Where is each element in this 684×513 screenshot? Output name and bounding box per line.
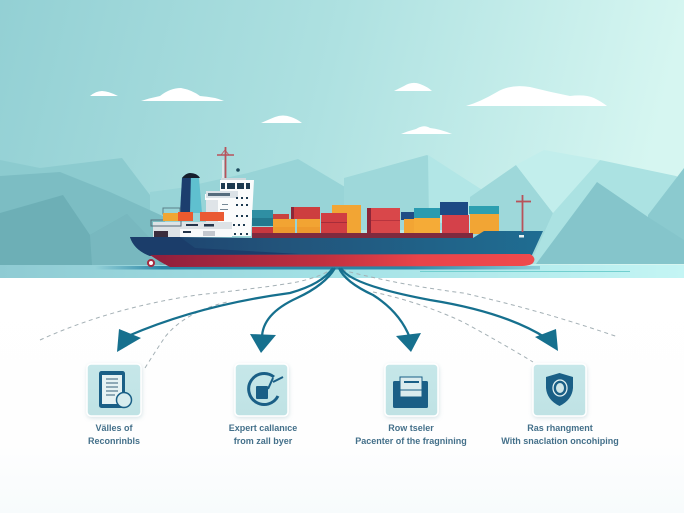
text: flow label: Row tseler [388,423,434,433]
hull [130,231,543,256]
text: recommendations label: Reconrinbls [88,436,140,446]
icon: folder tray [385,364,438,416]
icon: tablet report [87,364,141,416]
superstructure [205,180,254,236]
text: expert label [229,423,297,446]
icon: expert circle [235,364,288,416]
text: expert label: from zall byer [234,436,293,446]
cargo containers [252,202,499,234]
white lower panel [0,278,684,513]
text: risk label: Ras rhangment [527,423,593,433]
text: recommendations label [88,423,140,446]
rudder [148,260,154,266]
clouds [90,83,607,134]
text: risk label: With snaclation oncohiping [501,436,619,446]
sky background [0,0,684,280]
text: risk label [501,423,619,446]
arrow 2 [250,268,335,353]
red keel [150,254,534,267]
arrow 1 [117,268,333,352]
container ship [130,147,543,267]
dashed route lines [40,270,618,368]
bow mast [516,195,531,232]
deck rail [252,233,473,238]
text: recommendations label: Välles of [95,423,134,433]
mast: rear [217,147,234,178]
water [0,265,684,279]
mountains [0,150,684,265]
icon: shield [533,364,586,416]
text: flow label [355,423,467,446]
text: flow label: Pacenter of the fragnining [355,436,467,446]
text: expert label: Expert callanıce [229,423,297,433]
arrow 4 [341,268,558,351]
aft containers [163,208,180,214]
funnel [180,173,202,213]
arrow 3 [339,268,421,352]
lower deckhouse [153,222,232,237]
